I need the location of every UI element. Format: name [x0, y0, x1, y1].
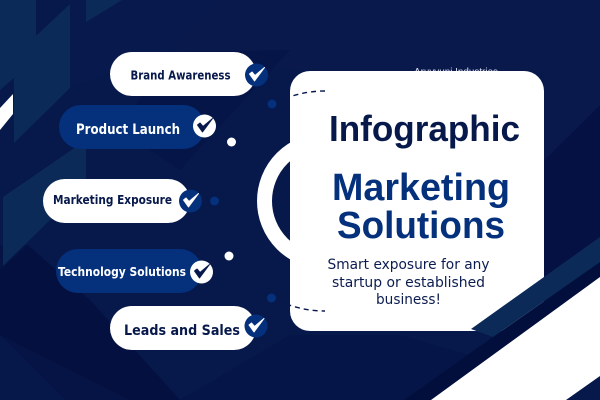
bottom right dark band — [404, 262, 600, 400]
main card — [290, 71, 544, 331]
ring behind card — [264, 140, 386, 262]
connector dashed arc — [215, 91, 325, 311]
card title: Infographic: Infographic — [329, 108, 520, 149]
bottom right white stripe — [431, 277, 600, 400]
faint text behind card: Aruvvuni Industries — [414, 67, 498, 78]
card description: Smart exposure for any — [328, 257, 490, 273]
background stripes left — [0, 0, 122, 266]
pill: Marketing Exposure — [43, 179, 202, 223]
pill: Product Launch — [59, 105, 216, 149]
card description — [328, 257, 490, 308]
pill: Technology Solutions: Technology Solutions — [58, 264, 186, 279]
card description: business! — [376, 292, 441, 308]
card title: Solutions: Solutions — [337, 205, 505, 247]
pill: Marketing Exposure: Marketing Exposure — [53, 193, 172, 207]
card description: startup or established — [332, 275, 485, 291]
white background sliver — [0, 94, 13, 130]
card title: Marketing: Marketing — [332, 167, 510, 209]
pill: Brand Awareness — [110, 52, 268, 96]
connector lines — [198, 85, 272, 316]
pill: Leads and Sales — [110, 306, 268, 350]
pill: Brand Awareness: Brand Awareness — [130, 68, 230, 82]
connector dots — [210, 100, 276, 302]
bottom right stripe — [471, 237, 600, 337]
pill: Leads and Sales: Leads and Sales — [124, 323, 240, 339]
pill: Product Launch: Product Launch — [76, 122, 180, 138]
pill: Technology Solutions — [56, 249, 213, 293]
